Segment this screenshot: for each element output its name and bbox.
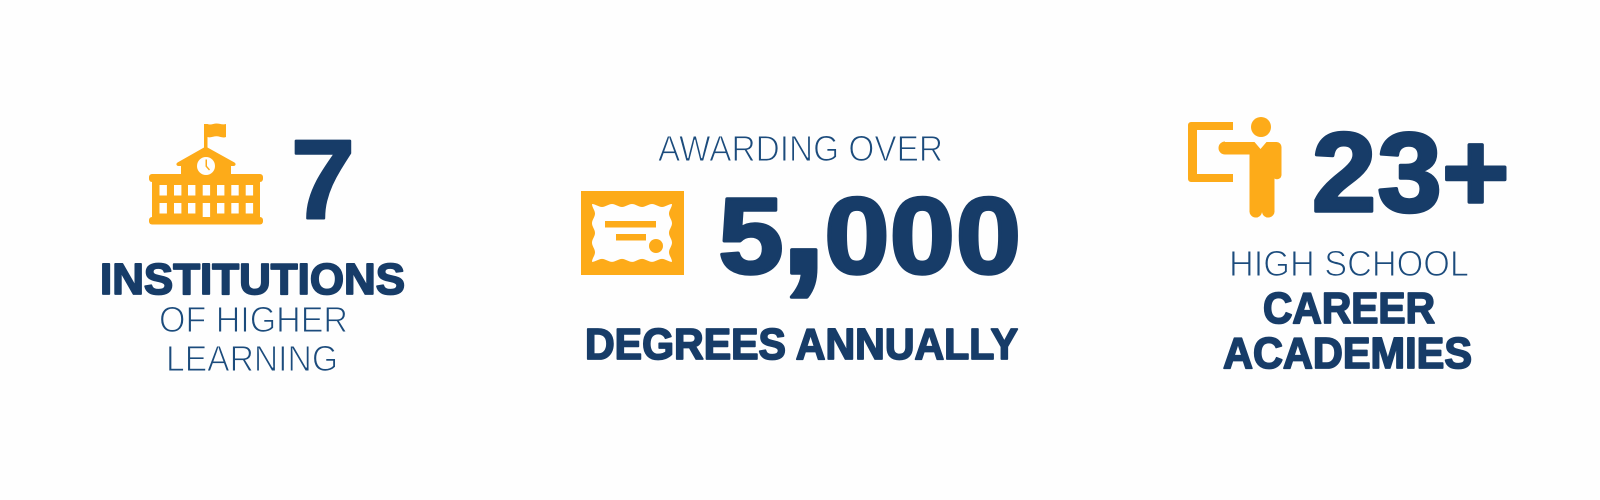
- text: learning: LEARNING: [166, 338, 338, 379]
- number: 7: 7: [291, 117, 355, 242]
- icon: diploma: [581, 191, 684, 275]
- number: 5,000: 0: [890, 175, 955, 296]
- text: high school: HIGH SCHOOL: [1229, 243, 1469, 284]
- panel: degrees: [581, 128, 1021, 369]
- text: of higher: OF HIGHER: [159, 299, 348, 340]
- icon: instructor at board: [1188, 117, 1282, 218]
- heading: degrees annually: DEGREES ANNUALLY: [585, 320, 1018, 369]
- heading: academies: ACADEMIES: [1223, 329, 1472, 378]
- number: 5,000: 5: [719, 175, 783, 296]
- panel: institutions: [100, 117, 405, 379]
- number: 23+: 3: [1378, 111, 1442, 236]
- number: 23+: 2: [1312, 111, 1376, 236]
- number: 5,000: 0: [824, 175, 889, 296]
- number: 5,000: 0: [956, 175, 1021, 296]
- number: 5,000: ,: [780, 134, 827, 307]
- number: 23+: +: [1442, 111, 1509, 236]
- heading: institutions: INSTITUTIONS: [100, 255, 405, 304]
- panel: career academies: [1188, 111, 1509, 378]
- text: awarding over: AWARDING OVER: [658, 128, 943, 169]
- icon: school building: [149, 124, 263, 224]
- heading: career: CAREER: [1263, 284, 1435, 333]
